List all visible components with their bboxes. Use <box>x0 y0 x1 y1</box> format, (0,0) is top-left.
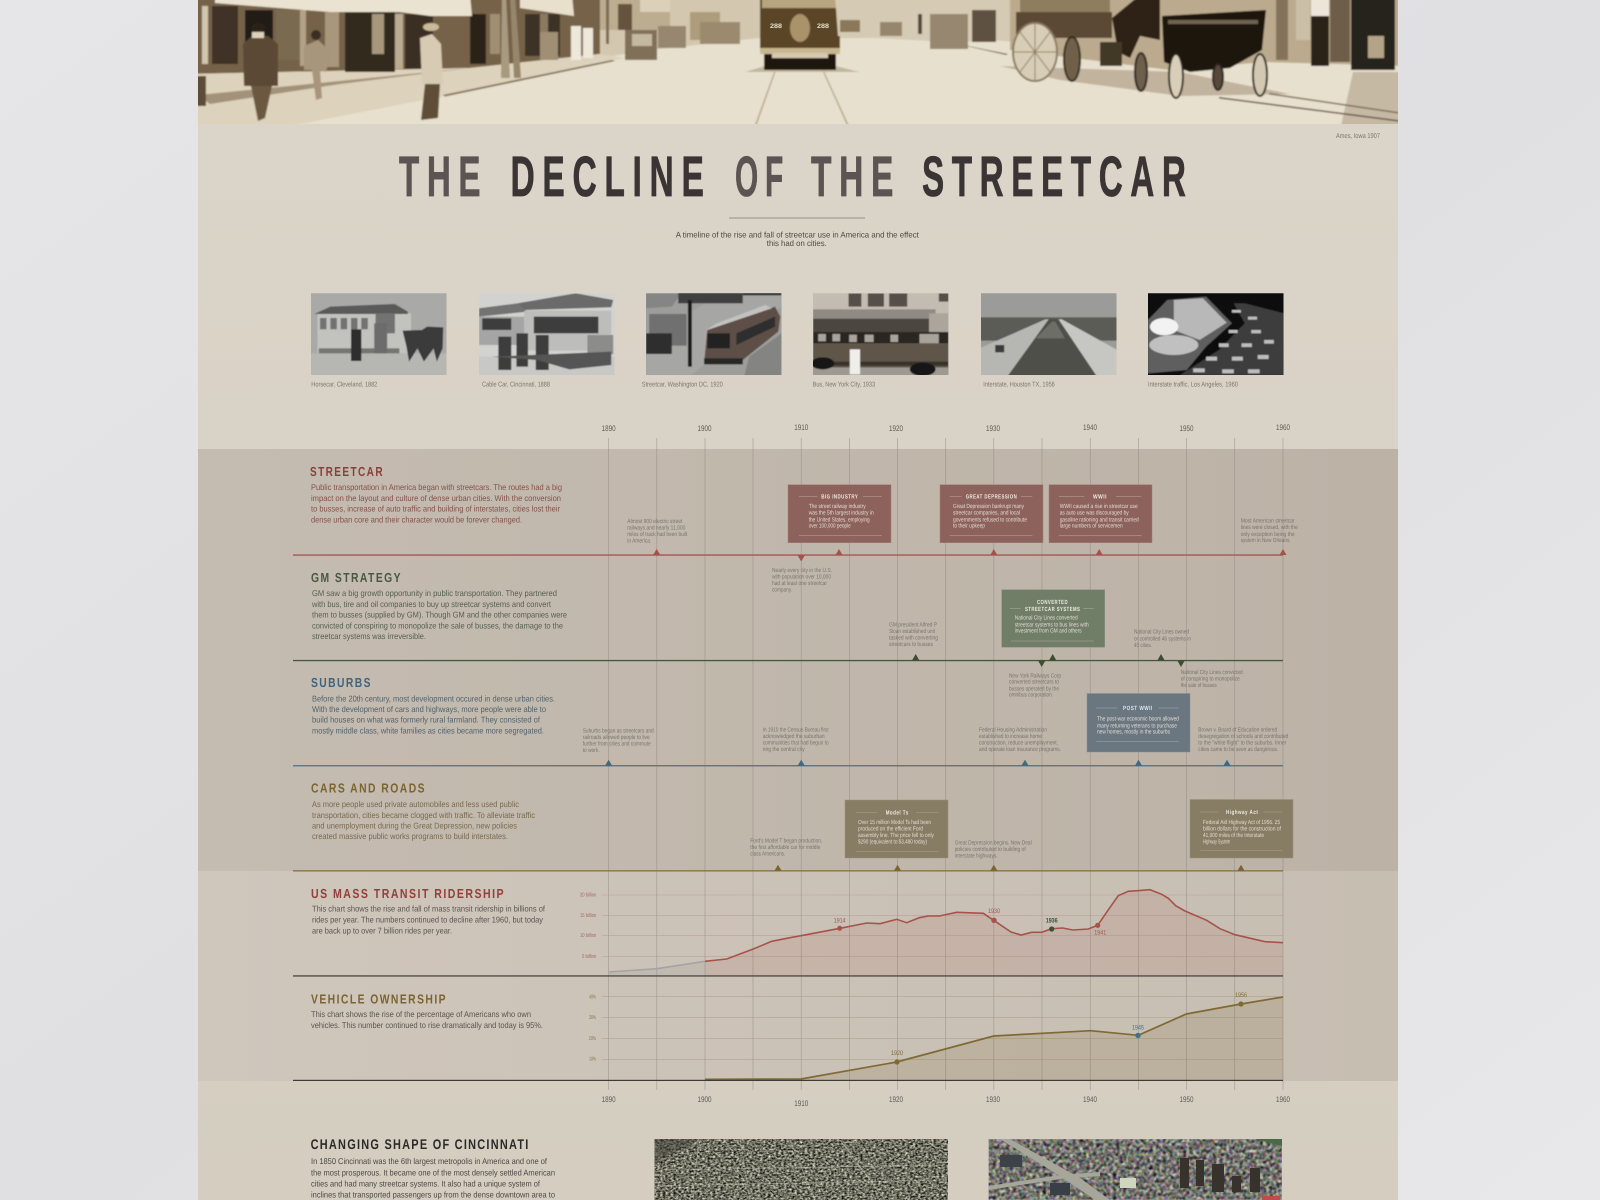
callout: post wwii <box>1087 694 1190 752</box>
panel: vehicle ownership <box>293 991 1283 1081</box>
callout: wwii: WWII caused a rise in streetcar use <box>1060 503 1138 510</box>
chart: vehicle ownership line: 1945 <box>1132 1025 1144 1032</box>
note: new york railways: New York Railways Corp <box>1009 672 1062 679</box>
note: national city lines owned: or controlled 46 systems in <box>1134 635 1191 642</box>
top year axis: 1960 <box>1276 423 1290 432</box>
note: great depression new deal: Great Depression begins. New Deal <box>955 840 1032 847</box>
sub-photo streetcar number 288: 288 <box>817 23 829 30</box>
text: cincinnati description: cities and had many streetcar systems. It also had a unique system of <box>311 1179 541 1189</box>
note: new york railways <box>1009 672 1062 699</box>
callout: big industry <box>788 485 891 543</box>
text: suburbs description: Before the 20th century, most development occured in dense urban cities. <box>312 693 555 703</box>
text: suburbs description: build houses on what was formerly rural farmland. They consisted of <box>312 715 541 725</box>
callout: big industry: BIG INDUSTRY <box>821 494 858 501</box>
note: brown v board <box>1198 727 1288 753</box>
note: national city lines owned <box>1134 629 1191 649</box>
photo: interstate <box>981 293 1116 375</box>
note: ford's model t: the first affordable car for middle <box>750 844 821 851</box>
text: cincinnati description: inclines that transported passengers up from the dense downtown area to <box>311 1190 555 1200</box>
note: ford's model t: class Americans. <box>750 850 786 858</box>
chart: vehicle ownership line: 10% <box>589 1056 596 1062</box>
callout: big industry: was the 5th largest industry in <box>808 510 874 517</box>
photo: cable car <box>479 293 614 375</box>
callout: converted streetcar systems: National City Lines converted <box>1015 615 1078 622</box>
note: suburbs began <box>583 728 654 754</box>
top year axis: 1900 <box>698 424 712 433</box>
note: 900 electric street railways <box>627 518 688 544</box>
callout: highway act <box>1190 800 1293 858</box>
callout: highway act: 41,000 miles of the Interstate <box>1203 832 1265 839</box>
note: most american lines closed <box>1241 518 1298 544</box>
text: suburbs description: With the development of cars and highways, more people were able to <box>312 704 546 714</box>
note: sloan unit: GM president Alfred P <box>889 622 937 629</box>
note: 900 electric street railways: in America. <box>627 537 652 544</box>
callout: model ts: Model Ts <box>886 809 909 816</box>
photo: interstate traffic <box>1148 293 1284 375</box>
callout: converted streetcar systems <box>1002 590 1105 647</box>
text: cincinnati description: the most prosperous. It became one of the most densely settled American <box>311 1168 555 1178</box>
callout: converted streetcar systems: STREETCAR SYSTEMS <box>1025 606 1080 613</box>
note: nearly every city: Nearly every city in the U.S. <box>772 567 832 574</box>
panel: streetcar row <box>293 464 1298 594</box>
bottom year axis: 1920 <box>889 1095 903 1104</box>
callout: great depression: Great Depression bankrupt many <box>953 503 1024 510</box>
note: brown v board: cities came to be seen as dangerous. <box>1198 746 1279 753</box>
bottom year axis: 1950 <box>1180 1095 1194 1104</box>
note: 900 electric street railways: Almost 900 electric street <box>627 518 683 525</box>
callout: great depression: governments refused to contribute <box>953 516 1028 523</box>
callout: converted streetcar systems: investment from GM and others <box>1015 628 1082 635</box>
note: suburbs began: to work. <box>583 747 600 754</box>
caption: interstate traffic: Interstate traffic, Los Angeles, 1960 <box>1148 381 1238 389</box>
note: suburbs began: further from cities and commute <box>583 741 651 748</box>
callout: converted streetcar systems: CONVERTED <box>1037 599 1068 606</box>
note: census bureau: acknowledged the suburban <box>763 733 825 740</box>
note: new york railways: omnibus corporation. <box>1009 692 1053 699</box>
callout: model ts: $290 (equivalent to $3,480 today) <box>858 839 927 846</box>
callout: great depression: to their upkeep <box>953 523 986 530</box>
note: national city lines convicted: National City Lines convicted <box>1181 669 1243 676</box>
note: new york railways: busses operated by the <box>1009 685 1060 692</box>
note: nearly every city: with population over 10,000 <box>771 574 832 580</box>
text: vehicle description: vehicles. This number continued to rise dramatically and today is 95%. <box>311 1020 543 1030</box>
callout: wwii: gasoline rationing and transit carried <box>1060 516 1139 523</box>
heading: ridership: US MASS TRANSIT RIDERSHIP <box>311 886 505 901</box>
callout: great depression <box>940 485 1043 543</box>
title: DECLINE <box>510 145 712 209</box>
panel: us mass transit ridership <box>293 886 1283 977</box>
note: federal housing administration: Federal Housing Administration <box>979 727 1047 734</box>
text: vehicle description: This chart shows the rise of the percentage of Americans who own <box>311 1009 531 1019</box>
bottom year axis: 1900 <box>698 1095 712 1104</box>
panel: gm strategy row <box>293 570 1283 699</box>
note: census bureau: communities that had begun to <box>763 740 829 746</box>
chart: vehicle ownership line: 1920 <box>891 1050 903 1057</box>
top year axis: 1930 <box>986 424 1000 433</box>
sub-photo streetcar number 288 <box>770 23 829 30</box>
text: cars description <box>312 799 535 841</box>
note: sloan unit <box>889 622 938 648</box>
photo: aerial cincinnati now <box>989 1139 1282 1200</box>
note: nearly every city: had at least one streetcar <box>772 580 827 587</box>
chart: ridership line: 10 billion <box>580 933 596 939</box>
top year axis: 1920 <box>889 424 903 433</box>
text: suburbs description: mostly middle class, white families as cities became more segregated. <box>312 726 544 736</box>
timeline band <box>198 449 1398 871</box>
note: federal housing administration: established to increase home <box>979 733 1043 740</box>
callout: post wwii: many returning veterans to purchase <box>1097 722 1178 729</box>
heading: vehicle ownership: VEHICLE OWNERSHIP <box>311 991 447 1006</box>
chart: ridership line: 15 billion <box>580 913 596 919</box>
note: brown v board: Brown v. Board of Education ordered <box>1198 727 1277 734</box>
callout: highway act: billion dollars for the construction of <box>1203 826 1281 832</box>
callout: highway act: Federal Aid Highway Act of 1956. 25 <box>1203 819 1281 826</box>
note: sloan unit: streetcars to busses <box>889 641 933 648</box>
note: brown v board: to the "white flight" to the suburbs. Inner <box>1198 740 1286 747</box>
title <box>399 145 1194 209</box>
timeline axis: cars <box>293 865 1283 872</box>
text: gm description: convicted of conspiring to monopolize the sale of busses, the damage to the <box>312 620 563 630</box>
photo: horsecar <box>311 293 446 375</box>
photo: aerial cincinnati then <box>655 1139 948 1200</box>
note: national city lines convicted: of conspiring to monopolize <box>1181 676 1240 682</box>
callout: highway act: Highway System <box>1203 839 1230 846</box>
callout: wwii: WWII <box>1093 494 1107 501</box>
heading: cars and roads: CARS AND ROADS <box>311 780 426 795</box>
note: most american lines closed: system in New Orleans. <box>1241 537 1291 544</box>
note: great depression new deal <box>955 840 1032 860</box>
chart: ridership line: 20 billion <box>580 893 596 899</box>
note: most american lines closed: only exception being the <box>1241 531 1295 538</box>
note: national city lines owned: 45 cities. <box>1134 642 1152 649</box>
timeline axis: streetcar <box>293 549 1286 562</box>
text: cars description: and unemployment during the Great Depression, new policies <box>312 821 517 831</box>
subtitle: A timeline of the rise and fall of streetcar use in America and the effect <box>676 230 919 239</box>
text: ridership description: are back up to over 7 billion rides per year. <box>312 925 452 935</box>
photo credit: Ames, Iowa 1907 <box>1336 133 1380 140</box>
top year axis: 1950 <box>1180 424 1194 433</box>
bottom year axis <box>602 1095 1290 1108</box>
text: streetcar description: Public transportation in America began with streetcars. The routes had a big <box>311 482 562 492</box>
callout: highway act: Highway Act <box>1226 809 1258 816</box>
bottom year axis: 1890 <box>602 1095 616 1104</box>
callout: wwii: as auto use was discouraged by <box>1060 510 1129 517</box>
note: most american lines closed: lines were closed, with the <box>1241 524 1298 531</box>
chart: ridership line: 1930 <box>988 908 1000 915</box>
caption: horsecar: Horsecar, Cleveland, 1882 <box>311 381 377 389</box>
sub-photo streetcar number 288: 288 <box>770 23 782 30</box>
caption: streetcar: Streetcar, Washington DC, 1920 <box>642 381 723 389</box>
title: OF <box>735 145 790 209</box>
text: cars description: created massive public works programs to build interstates. <box>312 831 508 841</box>
panel: suburbs row <box>293 675 1288 766</box>
note: suburbs began: Suburbs began as streetcars and <box>583 728 654 735</box>
text: streetcar description: impact on the layout and culture of dense urban cities. With the conversion <box>311 493 561 503</box>
callout: model ts: Over 15 million Model Ts had been <box>858 819 931 826</box>
timeline axis: suburbs <box>293 760 1283 766</box>
bottom year axis: 1910 <box>794 1099 809 1108</box>
chart: vehicle ownership line <box>293 992 1283 1081</box>
callout: post wwii: POST WWII <box>1123 705 1153 712</box>
note: nearly every city: company. <box>772 588 792 594</box>
title: STREETCAR <box>922 145 1194 209</box>
callout: big industry: over 100,000 people <box>809 523 851 530</box>
bottom year axis: 1960 <box>1276 1095 1290 1104</box>
callout: wwii: large numbers of servicemen <box>1060 523 1123 530</box>
caption: cable car: Cable Car, Cincinnati, 1888 <box>482 381 550 389</box>
text: streetcar description: dense urban core and their character would be forever changed. <box>311 514 522 524</box>
callout: post wwii: new homes, mostly in the suburbs <box>1097 729 1170 736</box>
text: gm description <box>311 588 567 641</box>
top year axis <box>602 423 1290 433</box>
chart band <box>198 871 1398 1081</box>
note: national city lines owned: National City Lines owned <box>1134 629 1189 636</box>
callout: converted streetcar systems: streetcar systems to bus lines with <box>1015 621 1089 628</box>
text: cars description: transportation, cities became clogged with traffic. To alleviate traffic <box>312 810 535 820</box>
callout: big industry: the United States, employing <box>809 516 870 523</box>
text: streetcar description: to busses, increase of auto traffic and building of interstates, cities lost their <box>311 504 560 514</box>
note: census bureau <box>763 726 829 753</box>
callout: model ts: produced on the efficient Ford <box>858 826 923 832</box>
timeline axis: gm <box>293 654 1283 667</box>
note: national city lines convicted <box>1181 669 1243 689</box>
chart: vehicle ownership line: 30% <box>589 1015 596 1021</box>
note: federal housing administration: construction, reduce unemployment, <box>979 740 1058 747</box>
top year axis: 1890 <box>602 424 616 433</box>
text: ridership description <box>312 904 546 935</box>
panel: changing shape of cincinnati <box>311 1136 1282 1200</box>
text: streetcar description <box>311 482 562 524</box>
text: vehicle description <box>311 1009 543 1030</box>
text: gm description: streetcar systems was irreversible. <box>312 631 426 641</box>
top year axis: 1910 <box>794 423 809 432</box>
note: great depression new deal: policies contributed to building of <box>955 846 1026 853</box>
callout: great depression: GREAT DEPRESSION <box>966 494 1017 501</box>
bottom year axis: 1930 <box>986 1095 1000 1104</box>
note: federal housing administration <box>979 727 1061 753</box>
note: federal housing administration: and operate loan insurance programs. <box>979 746 1061 753</box>
note: ford's model t: Ford's Model T began production, <box>750 838 823 845</box>
note: brown v board: desegregation of schools and contributed <box>1198 733 1288 740</box>
callout: post wwii: The post-war economic boom allowed <box>1097 716 1179 723</box>
heading: cincinnati: CHANGING SHAPE OF CINCINNATI <box>311 1136 530 1152</box>
photo: streetcar <box>646 293 782 375</box>
text: ridership description: This chart shows the rise and fall of mass transit ridership in billions of <box>312 904 546 914</box>
note: new york railways: converted streetcars to <box>1009 679 1060 686</box>
note: suburbs began: railroads allowed people to live <box>583 734 650 741</box>
chart: vehicle ownership line: 20% <box>589 1036 596 1042</box>
text: gm description: GM saw a big growth opportunity in public transportation. They partnered <box>312 588 557 598</box>
text: cincinnati description: In 1850 Cincinnati was the 6th largest metropolis in America and one of <box>311 1156 548 1166</box>
chart: vehicle ownership line: 40% <box>589 994 596 1000</box>
text: suburbs description <box>312 693 555 736</box>
text: gm description: them to busses (supplied by GM). Though GM and the other companies were <box>312 610 567 620</box>
panel: cars and roads row <box>293 780 1293 872</box>
text: ridership description: rides per year. The numbers continued to decline after 1960, but today <box>312 914 544 924</box>
chart: ridership line <box>293 890 1283 977</box>
text: gm description: with bus, tire and oil companies to buy up streetcar systems and convert <box>311 599 552 609</box>
chart: vehicle ownership line: 1956 <box>1235 992 1247 999</box>
note: sloan unit: Sloan established unit <box>889 628 935 635</box>
subtitle: this had on cities. <box>767 239 827 248</box>
chart: ridership line: 1914 <box>834 918 846 925</box>
header photo: street scene, Ames Iowa <box>198 0 1398 124</box>
title: THE <box>399 145 488 209</box>
photo: bus <box>813 293 948 375</box>
top year axis: 1940 <box>1083 423 1097 432</box>
heading: streetcar: STREETCAR <box>310 464 384 479</box>
chart: ridership line: 1936 <box>1046 918 1058 925</box>
title: THE <box>811 145 901 209</box>
subtitle <box>676 230 919 248</box>
bottom year axis: 1940 <box>1083 1095 1097 1104</box>
heading: suburbs: SUBURBS <box>311 675 372 690</box>
note: 900 electric street railways: railways and nearly 11,000 <box>627 524 686 532</box>
callout: model ts: assembly line. The price fell to only <box>858 832 934 839</box>
note: census bureau: ring the central city <box>763 746 805 753</box>
text: cars description: As more people used private automobiles and less used public <box>312 799 519 809</box>
note: ford's model t <box>750 838 823 858</box>
callout: great depression: streetcar companies, and local <box>953 510 1020 517</box>
caption: interstate: Interstate, Houston TX, 1956 <box>983 382 1055 389</box>
note: most american lines closed: Most American streetcar <box>1241 518 1295 525</box>
caption: bus: Bus, New York City, 1933 <box>813 381 875 389</box>
heading: gm strategy: GM STRATEGY <box>311 570 402 585</box>
note: census bureau: In 1910 the Census Bureau first <box>763 726 829 733</box>
chart: ridership line: 5 billion <box>582 954 596 960</box>
note: 900 electric street railways: miles of track had been built <box>627 531 688 538</box>
callout: big industry: The street railway industry <box>809 503 866 510</box>
note: great depression new deal: interstate highways. <box>955 853 998 860</box>
chart: ridership line: 1941 <box>1094 930 1107 937</box>
text: cincinnati description <box>311 1156 555 1200</box>
note: nearly every city <box>771 567 832 594</box>
note: sloan unit: tasked with converting <box>889 635 938 642</box>
callout: model ts <box>845 800 948 858</box>
callout: wwii <box>1049 485 1152 543</box>
note: national city lines convicted: the sale of busses <box>1181 682 1217 689</box>
